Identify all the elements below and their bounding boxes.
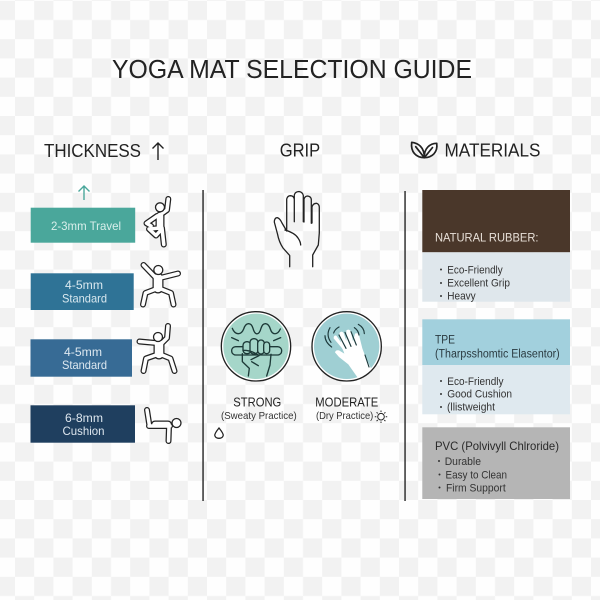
divider: grip and materials xyxy=(404,191,406,501)
text: moderate grip label xyxy=(315,396,378,422)
list: PVC properties xyxy=(438,456,507,494)
text: moderate grip label: (Dry Practice) xyxy=(316,410,373,422)
icon: warrior pose figure xyxy=(140,326,174,371)
icon: moderate grip hand in circle xyxy=(312,312,381,381)
panel: 4-5mm standard bar xyxy=(31,273,134,310)
panel: PVC: PVC (Polvivyll Chlroride) xyxy=(435,439,559,453)
list: natural rubber properties: Heavy xyxy=(447,290,476,302)
panel: natural rubber xyxy=(422,190,570,302)
list: TPE properties: (llistweight xyxy=(447,402,495,414)
panel: TPE: (Tharpsshomtic Elasentor) xyxy=(435,349,560,361)
panel: 6-8mm cushion bar: Cushion xyxy=(62,424,104,438)
icon: tree pose figure xyxy=(146,199,168,244)
text: strong grip label: (Sweaty Practice) xyxy=(221,410,297,422)
panel: TPE: TPE xyxy=(435,332,455,346)
heading: thickness: THICKNESS xyxy=(44,140,141,161)
list: PVC properties: Durable xyxy=(445,456,481,468)
panel: second 4-5mm standard bar xyxy=(30,339,132,377)
icon: teal up arrow xyxy=(78,186,90,200)
panel: natural rubber: NATURAL RUBBER: xyxy=(435,231,538,245)
icon: balance pose figure xyxy=(147,410,181,441)
panel: 6-8mm cushion bar xyxy=(30,405,135,443)
list: natural rubber properties: Excellent Grip xyxy=(447,278,510,290)
icon: leaves xyxy=(412,142,437,158)
list: TPE properties xyxy=(440,376,512,414)
heading: materials: MATERIALS xyxy=(444,140,540,161)
panel: PVC xyxy=(422,427,570,499)
panel: second 4-5mm standard bar: 4-5mm xyxy=(64,345,102,359)
list: PVC properties: Firm Support xyxy=(446,482,506,494)
panel: 2-3mm travel bar: 2-3mm Travel xyxy=(51,219,121,233)
panel: 4-5mm standard bar: 4-5mm xyxy=(65,278,103,292)
list: TPE properties: Good Cushion xyxy=(447,389,512,401)
panel: TPE xyxy=(422,319,570,414)
text: strong grip label: STRONG xyxy=(233,396,281,410)
icon: sun xyxy=(375,410,387,423)
list: PVC properties: Easy to Clean xyxy=(446,470,507,482)
divider: thickness and grip xyxy=(202,190,204,501)
icon: up arrow xyxy=(152,143,164,160)
icon: open hand xyxy=(274,192,319,267)
panel: 6-8mm cushion bar: 6-8mm xyxy=(65,411,103,425)
title: YOGA MAT SELECTION GUIDE xyxy=(112,54,472,84)
icon: goddess pose figure, arms raised xyxy=(143,265,178,304)
text: moderate grip label: MODERATE xyxy=(315,396,378,410)
panel: second 4-5mm standard bar: Standard xyxy=(62,358,107,372)
icon: strong grip fist in circle xyxy=(221,312,291,381)
list: natural rubber properties: Eco-Friendly xyxy=(447,264,503,276)
icon: water drop xyxy=(215,428,223,438)
panel: 2-3mm travel bar xyxy=(31,208,135,243)
list: natural rubber properties xyxy=(440,264,510,302)
panel: 4-5mm standard bar: Standard xyxy=(62,292,107,306)
heading: grip: GRIP xyxy=(280,140,320,161)
text: strong grip label xyxy=(221,396,297,422)
list: TPE properties: Eco-Friendly xyxy=(447,376,504,388)
